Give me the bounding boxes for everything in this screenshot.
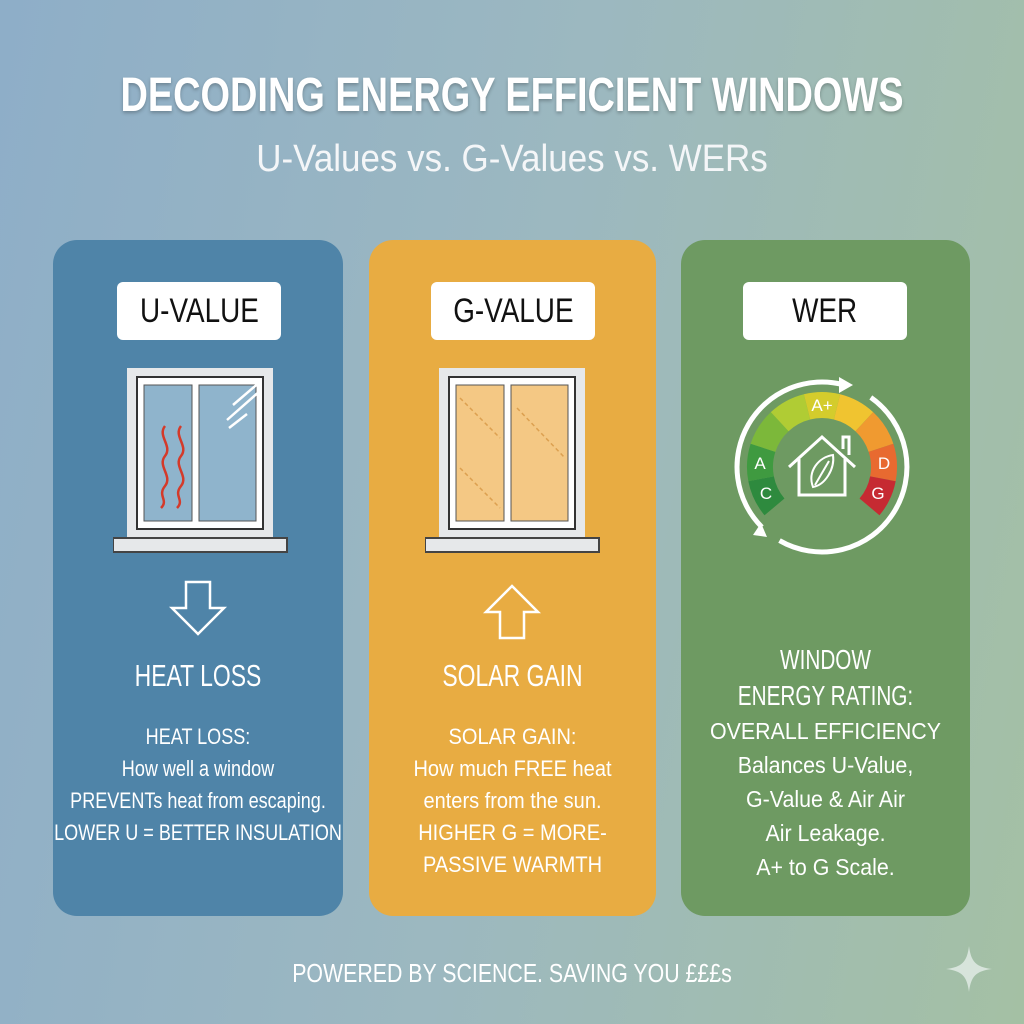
text: solar gain: HIGHER G = MORE- [418, 820, 607, 845]
subtitle: U-Values vs. G-Values vs. WERs [256, 138, 768, 180]
arrow: down [169, 580, 227, 636]
label: g-value: G-VALUE [453, 292, 573, 330]
text: solar gain: SOLAR GAIN: [449, 724, 576, 749]
text: solar gain: How much FREE heat [413, 756, 612, 781]
text: heat loss: How well a window [122, 756, 274, 781]
panel: g-value [369, 240, 656, 916]
heading: heat loss: HEAT LOSS [135, 658, 261, 693]
icon: energy rating dial: A [754, 454, 766, 473]
icon: energy rating dial [734, 377, 910, 554]
footer: POWERED BY SCIENCE. SAVING YOU £££s [292, 958, 732, 988]
text: wer [710, 718, 941, 880]
text: wer: A+ to G Scale. [756, 854, 895, 880]
text: heat loss: HEAT LOSS: [146, 724, 250, 749]
text: wer: Balances U-Value, [738, 752, 913, 778]
text: heat loss: LOWER U = BETTER INSULATION [54, 820, 342, 845]
panel: u-value [53, 240, 343, 916]
title: DECODING ENERGY EFFICIENT WINDOWS [120, 69, 904, 122]
icon: window with heat [113, 368, 288, 553]
label: g-value [431, 282, 595, 340]
label: wer: WER [792, 292, 858, 330]
text: wer: OVERALL EFFICIENCY [710, 718, 941, 744]
panel: wer [681, 240, 970, 916]
heading: window energy rating: ENERGY RATING: [738, 680, 913, 711]
icon: energy rating dial: C [760, 484, 772, 503]
text: solar gain: PASSIVE WARMTH [423, 852, 602, 877]
text: solar gain: enters from the sun. [423, 788, 602, 813]
text: heat loss [54, 724, 342, 845]
text: wer: G-Value & Air Air [746, 786, 905, 812]
label: u-value [117, 282, 281, 340]
icon: window sunlit [425, 368, 600, 553]
icon: energy rating dial: G [871, 484, 885, 503]
label: u-value: U-VALUE [140, 292, 258, 330]
icon: sparkle [946, 946, 992, 992]
text: wer: Air Leakage. [765, 820, 886, 846]
icon: energy rating dial: D [878, 454, 890, 473]
icon: energy rating dial: A+ [811, 396, 833, 415]
heading: window energy rating [738, 644, 913, 711]
text: heat loss: PREVENTs heat from escaping. [70, 788, 326, 813]
text: solar gain [413, 724, 612, 877]
arrow: up [483, 584, 541, 640]
heading: window energy rating: WINDOW [780, 644, 871, 675]
label: wer [743, 282, 907, 340]
heading: solar gain: SOLAR GAIN [442, 658, 583, 693]
